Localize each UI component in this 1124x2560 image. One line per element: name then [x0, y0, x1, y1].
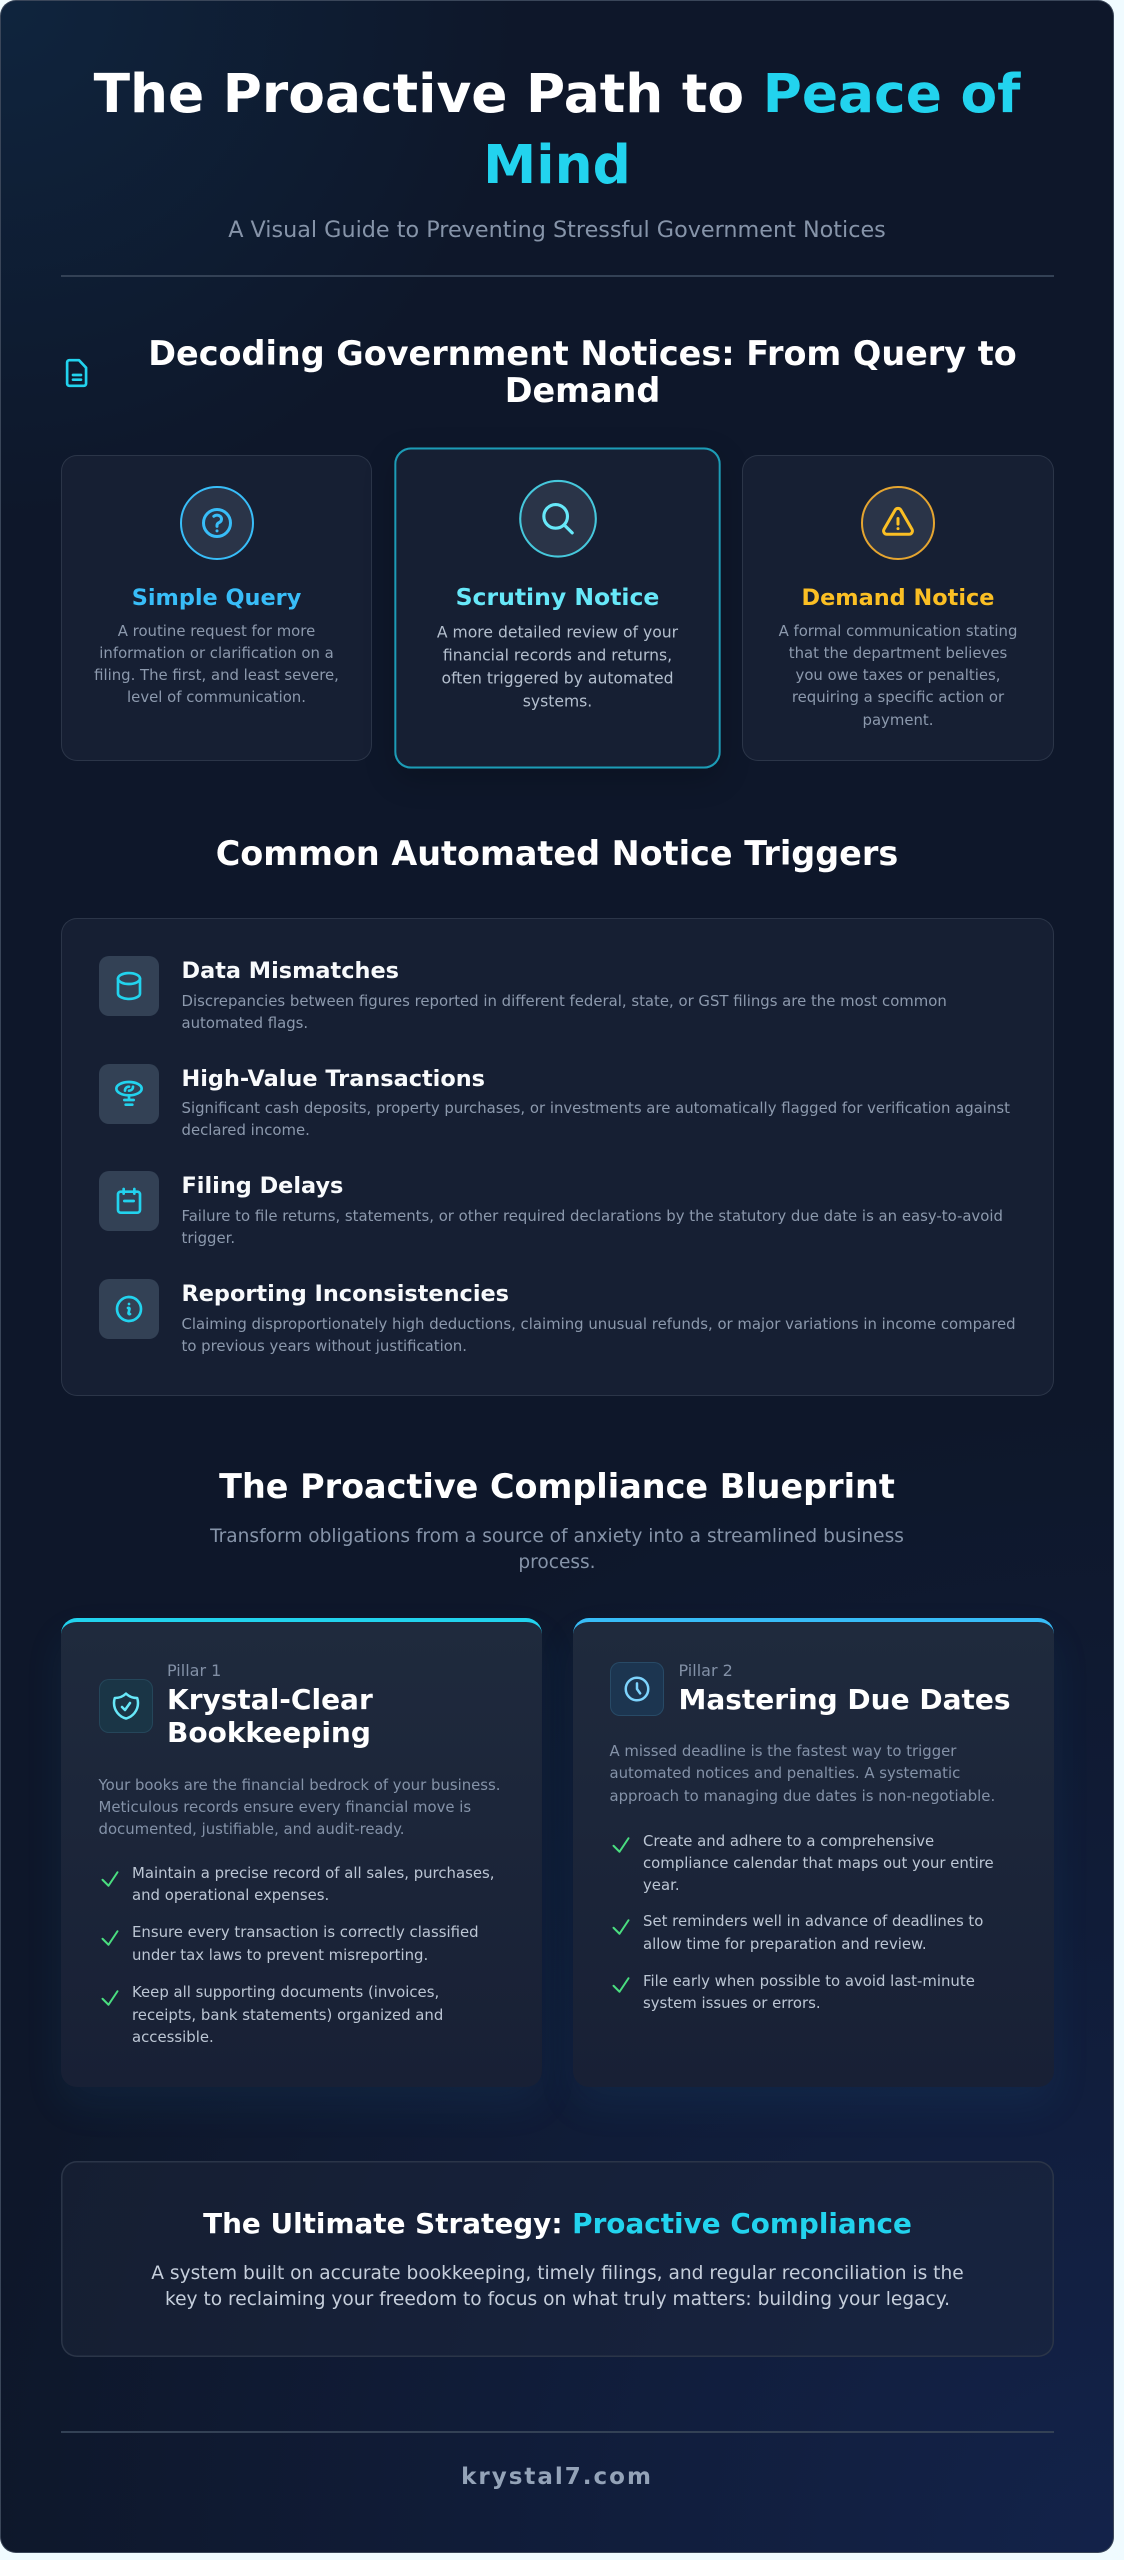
- trigger description: Claiming disproportionately high deductions, claiming unusual refunds, or major variations in income compared: [182, 1315, 1016, 1333]
- pillar intro: automated notices and penalties. A systematic: [610, 1764, 960, 1782]
- card text: A formal communication stating: [779, 622, 1017, 640]
- trigger: data mismatches: [99, 956, 947, 1032]
- list item: Create and adhere to a comprehensive: [643, 1832, 934, 1850]
- icon: magnifying glass: [519, 480, 596, 558]
- card text: level of communication.: [127, 688, 306, 706]
- title: Mind: [483, 132, 631, 196]
- card text: [437, 622, 678, 711]
- icon: warning triangle: [861, 486, 935, 560]
- card text: filing. The first, and least severe,: [94, 666, 339, 684]
- pillar intro: documented, justifiable, and audit-ready.: [98, 1820, 404, 1838]
- trigger: reporting inconsistencies: [99, 1279, 1016, 1355]
- card text: [778, 622, 1017, 729]
- list item: [643, 1832, 994, 1894]
- strategy text: key to reclaiming your freedom to focus on what truly matters: building your legacy.: [165, 2288, 950, 2310]
- trigger description: automated flags.: [182, 1014, 308, 1032]
- trigger title: Filing Delays: [182, 1173, 343, 1199]
- list item: under tax laws to prevent misreporting.: [132, 1946, 428, 1964]
- trigger: high-value transactions: [99, 1064, 1010, 1139]
- list item: [643, 1972, 975, 2012]
- card title: Scrutiny Notice: [456, 583, 659, 611]
- icon: check: [102, 1871, 118, 1887]
- trigger description: trigger.: [182, 1229, 235, 1247]
- list item: accessible.: [132, 2028, 214, 2046]
- list item: [643, 1912, 983, 1953]
- blueprint subtitle: Transform obligations from a source of anxiety into a streamlined business: [210, 1526, 904, 1546]
- list item: Keep all supporting documents (invoices,: [132, 1983, 439, 2001]
- footer: website: krystal7.com: [461, 2464, 653, 2490]
- strategy heading: The Ultimate Strategy: Proactive Compliance: [203, 2207, 912, 2240]
- pillar intro: [610, 1742, 995, 1805]
- icon: check: [612, 1837, 630, 1853]
- card text: A more detailed review of your: [437, 622, 678, 641]
- subtitle: A Visual Guide to Preventing Stressful Government Notices: [228, 217, 886, 243]
- list item: allow time for preparation and review.: [643, 1935, 927, 1953]
- card text: that the department believes: [789, 644, 1007, 662]
- trigger description: Discrepancies between figures reported in different federal, state, or GST filings are the most common: [182, 992, 947, 1010]
- card text: payment.: [862, 711, 934, 729]
- card text: you owe taxes or penalties,: [796, 666, 1000, 684]
- card title: Demand Notice: [802, 584, 994, 610]
- pillar title: Krystal-Clear: [167, 1683, 373, 1716]
- heading: common automated notice triggers: Common Automated Notice Triggers: [216, 834, 898, 873]
- icon: transactions: [99, 1064, 159, 1124]
- trigger description: to previous years without justification.: [182, 1337, 467, 1355]
- panel: pillar 2: [573, 1618, 1054, 2087]
- title: The Proactive Path to Peace of: [94, 62, 1020, 125]
- card text: often triggered by automated: [442, 669, 673, 688]
- card text: [94, 622, 339, 706]
- icon: clock: [610, 1662, 664, 1716]
- list item: [132, 1983, 443, 2046]
- panel: ultimate strategy: [61, 2161, 1054, 2357]
- panel: simple query: [61, 455, 372, 761]
- pillar intro: approach to managing due dates is non-negotiable.: [610, 1787, 995, 1805]
- icon: shield check: [98, 1678, 152, 1732]
- list item: [132, 1923, 479, 1964]
- panel: demand notice: [742, 455, 1054, 761]
- card text: A routine request for more: [118, 622, 315, 640]
- list item: Ensure every transaction is correctly classified: [132, 1923, 479, 1941]
- strategy text: A system built on accurate bookkeeping, timely filings, and regular reconciliation is the: [151, 2262, 964, 2284]
- trigger description: [182, 1315, 1016, 1355]
- pillar title: Mastering Due Dates: [678, 1683, 1011, 1716]
- trigger title: Data Mismatches: [182, 958, 399, 984]
- card text: financial records and returns,: [443, 646, 672, 665]
- card text: information or clarification on a: [99, 644, 334, 662]
- trigger title: High-Value Transactions: [182, 1066, 485, 1092]
- pillar intro: A missed deadline is the fastest way to trigger: [610, 1742, 956, 1760]
- list item: system issues or errors.: [643, 1994, 821, 2012]
- icon: check: [102, 1990, 118, 2006]
- icon: check: [102, 1930, 118, 1946]
- list item: compliance calendar that maps out your entire: [643, 1854, 994, 1872]
- card text: requiring a specific action or: [792, 688, 1004, 706]
- list item: receipts, bank statements) organized and: [132, 2006, 443, 2024]
- strategy text: [151, 2262, 964, 2310]
- icon: database: [99, 956, 159, 1016]
- pillar label: Pillar 2: [678, 1660, 733, 1680]
- trigger description: Failure to file returns, statements, or other required declarations by the statutory due date is an easy-to-avoid: [182, 1207, 1003, 1225]
- panel: scrutiny notice: [394, 447, 721, 769]
- trigger description: [182, 992, 947, 1032]
- icon: document: [66, 358, 88, 388]
- blueprint subtitle: [210, 1526, 904, 1573]
- panel: pillar 1: [61, 1618, 542, 2087]
- heading: decoding government notices: [148, 334, 1017, 410]
- card text: systems.: [523, 693, 592, 711]
- icon: question circle: [180, 486, 254, 560]
- list item: and operational expenses.: [132, 1886, 329, 1904]
- checklist: [102, 1864, 494, 2046]
- trigger description: [182, 1099, 1010, 1139]
- icon: check: [612, 1919, 630, 1935]
- trigger: filing delays: [99, 1171, 1003, 1247]
- pillar title: Bookkeeping: [167, 1716, 371, 1749]
- trigger description: declared income.: [182, 1121, 310, 1139]
- list item: year.: [643, 1876, 680, 1894]
- trigger description: [182, 1207, 1003, 1247]
- trigger description: Significant cash deposits, property purchases, or investments are automatically flagged for verification against: [182, 1099, 1010, 1117]
- list item: [132, 1864, 494, 1904]
- heading: decoding government notices: Demand: [505, 371, 660, 410]
- heading: proactive compliance blueprint: The Proactive Compliance Blueprint: [219, 1467, 895, 1506]
- title: [94, 62, 1021, 196]
- list item: Maintain a precise record of all sales, purchases,: [132, 1864, 494, 1882]
- icon: info circle: [99, 1279, 159, 1339]
- list item: File early when possible to avoid last-minute: [643, 1972, 975, 1990]
- pillar label: Pillar 1: [167, 1660, 221, 1680]
- pillar title: [167, 1683, 373, 1749]
- icon: calendar: [99, 1171, 159, 1231]
- checklist: [612, 1832, 994, 2012]
- list item: Set reminders well in advance of deadlines to: [643, 1912, 983, 1930]
- blueprint subtitle: process.: [518, 1552, 596, 1573]
- pillar intro: Meticulous records ensure every financial move is: [98, 1798, 471, 1816]
- pillar intro: Your books are the financial bedrock of your business.: [98, 1776, 501, 1794]
- pillar intro: [98, 1776, 501, 1838]
- icon: check: [612, 1977, 630, 1993]
- heading: decoding government notices: Decoding Government Notices: From Query to: [148, 334, 1017, 373]
- card title: Simple Query: [132, 584, 301, 610]
- trigger title: Reporting Inconsistencies: [182, 1281, 509, 1307]
- panel: triggers list: [61, 918, 1054, 1396]
